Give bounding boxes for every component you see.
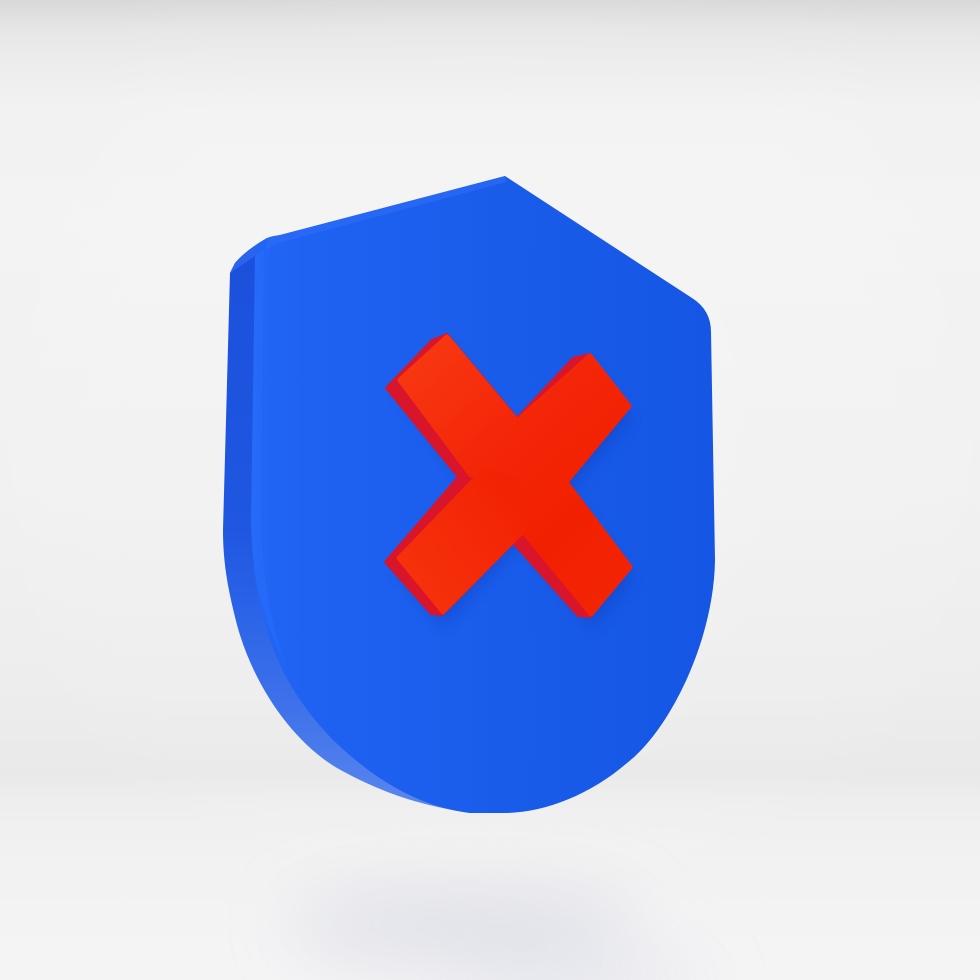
shield face [251,176,715,813]
cross face [399,337,630,614]
shield side edge [223,238,470,813]
shield [223,176,715,813]
cross lower-left arm [399,471,523,612]
red cross [385,334,633,629]
cross depth [385,334,590,617]
cross shadow [397,346,633,629]
shield top bevel [266,176,506,250]
shield rim highlight [230,238,272,273]
floor shadow [290,889,710,980]
shield left bevel [251,250,288,670]
